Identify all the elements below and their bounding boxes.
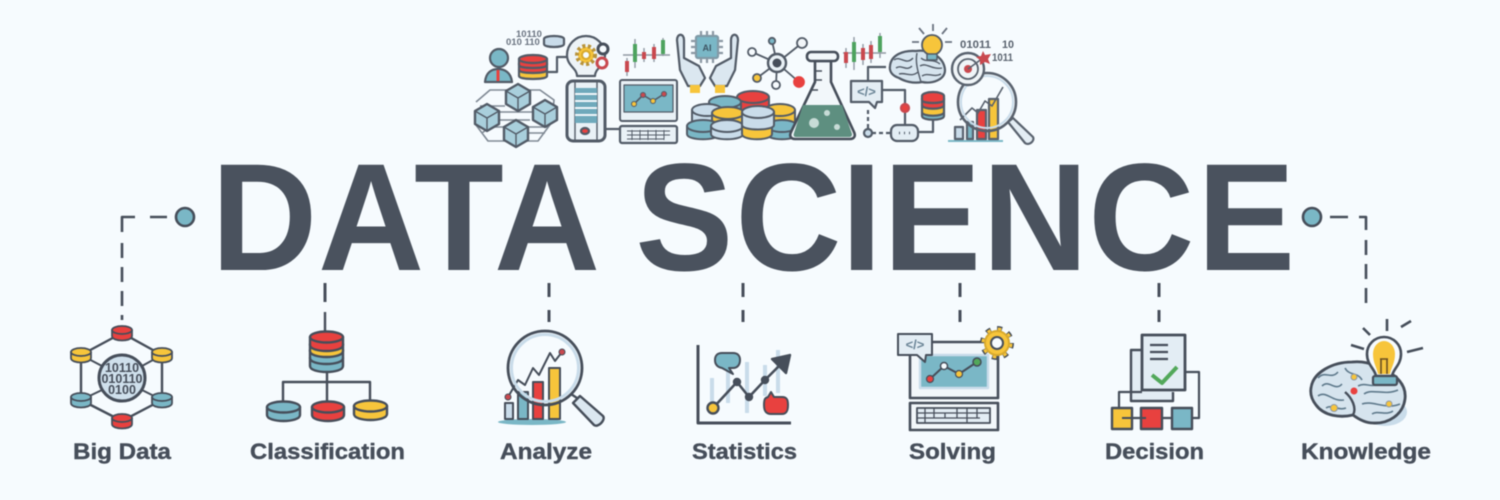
binary text: top right: 10 (1002, 39, 1014, 51)
binary text: top right: 01011 (960, 39, 991, 51)
binary text: top right (960, 39, 1014, 64)
label: Statistics: Statistics (692, 439, 797, 464)
icon: classification tree (267, 312, 387, 421)
icon: analyze magnifier (498, 331, 604, 426)
label: Big Data: Big Data (73, 439, 172, 464)
icon: big data network: 0100 (108, 383, 136, 397)
icon: decision flow (1112, 335, 1199, 429)
top illustration cluster (475, 24, 1033, 147)
binary text: top right: 1011 (992, 52, 1013, 64)
icon: molecule (748, 38, 807, 89)
candlestick chart: left (623, 38, 670, 76)
icon: person (485, 49, 512, 82)
label: Solving: Solving (909, 439, 996, 464)
icon: code flow diagram: </> (857, 84, 876, 99)
binary text: top left: 10110 (516, 29, 542, 40)
icon: knowledge brain and bulb (1311, 319, 1423, 426)
binary text: top left: 010 110 (506, 37, 540, 48)
binary text: top left (506, 29, 542, 48)
connector node: right (1303, 208, 1321, 226)
icon: database stack (519, 55, 568, 79)
connector node: left (176, 208, 194, 226)
label: Analyze: Analyze (500, 439, 592, 464)
icon: flask (790, 52, 855, 139)
icon: big data network: 010110 (101, 372, 143, 386)
icon: brain with bulb (890, 24, 952, 83)
icon: computer tower (567, 81, 620, 141)
icon: code flow diagram (851, 67, 944, 141)
icon: lightbulb with gears (567, 36, 608, 76)
icon: magnifier with bar chart and target (948, 51, 1033, 144)
label: Classification: Classification (250, 439, 405, 464)
icon: big data network: 10110 (105, 361, 139, 375)
icon: AI chip in hands: AI (702, 43, 712, 53)
icon group: bottom row (71, 312, 1431, 464)
icon: AI chip in hands (677, 31, 738, 93)
label: Decision: Decision (1105, 439, 1204, 464)
icon: big data network (71, 326, 172, 428)
icon: desktop monitor and keyboard (620, 80, 677, 143)
icon: cube network (475, 84, 557, 147)
icon: solving laptop (898, 328, 1012, 430)
icon: small disc (544, 36, 564, 47)
title: DATA SCIENCE (211, 131, 1295, 303)
icon: coin stacks (687, 91, 797, 139)
label: Knowledge: Knowledge (1301, 439, 1431, 464)
icon: solving laptop: </> (906, 337, 925, 352)
dashed connectors (122, 217, 1366, 322)
candlestick chart: right (843, 33, 886, 70)
icon: statistics chart (698, 345, 791, 423)
